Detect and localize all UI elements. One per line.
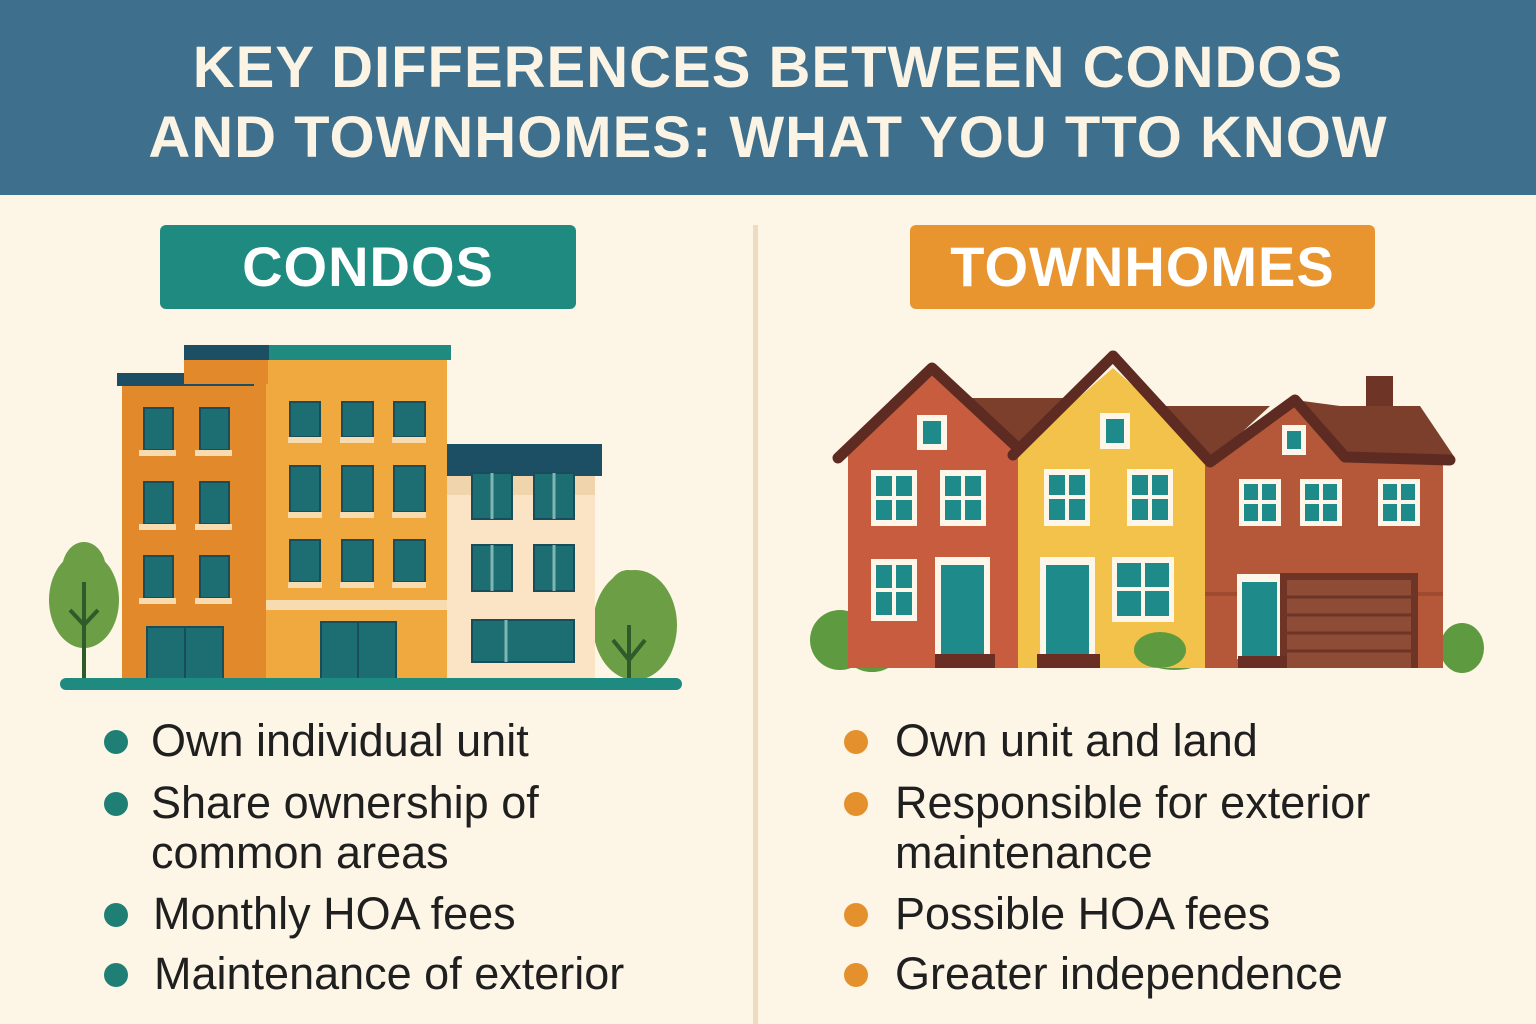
back roofs xyxy=(950,398,1075,455)
buildings xyxy=(117,345,602,680)
bullet 2 xyxy=(844,777,1370,878)
steps xyxy=(935,654,1287,668)
ground xyxy=(60,678,682,690)
front bush xyxy=(1134,632,1186,668)
chimney xyxy=(1366,376,1393,406)
left tree xyxy=(49,542,119,680)
bullet 2: Responsible for exterior xyxy=(895,777,1370,828)
bullet 2 xyxy=(104,777,539,878)
divider xyxy=(753,225,758,1024)
heading: townhomes: TOWNHOMES xyxy=(950,235,1335,298)
house: yellow xyxy=(1013,356,1210,668)
title: AND TOWNHOMES: WHAT YOU TTO KNOW xyxy=(148,105,1388,170)
right tree xyxy=(593,570,677,680)
bullet 4: Greater independence xyxy=(895,948,1343,999)
list: townhomes xyxy=(844,715,1370,999)
bullet 3: Possible HOA fees xyxy=(895,888,1270,939)
bullet 2: Share ownership of xyxy=(151,777,539,828)
bullet 3: Monthly HOA fees xyxy=(153,888,516,939)
garage xyxy=(1280,573,1418,668)
heading: townhomes xyxy=(910,225,1375,309)
house: red xyxy=(838,368,1018,668)
bullet 1: Own unit and land xyxy=(895,715,1258,766)
bullet 2: common areas xyxy=(151,827,449,878)
list: condos xyxy=(104,715,624,999)
bullet 1: Own individual unit xyxy=(151,715,529,766)
bushes xyxy=(810,610,1484,673)
bullet 4: Maintenance of exterior xyxy=(154,948,624,999)
house: brown xyxy=(1205,400,1450,668)
heading: condos xyxy=(160,225,576,309)
windows xyxy=(871,413,1420,659)
bullet 2: maintenance xyxy=(895,827,1153,878)
illustration: townhomes xyxy=(810,350,1484,673)
illustration: condo buildings xyxy=(49,345,682,690)
title: KEY DIFFERENCES BETWEEN CONDOS xyxy=(193,35,1343,100)
heading: condos: CONDOS xyxy=(242,235,494,298)
title xyxy=(0,0,1536,195)
